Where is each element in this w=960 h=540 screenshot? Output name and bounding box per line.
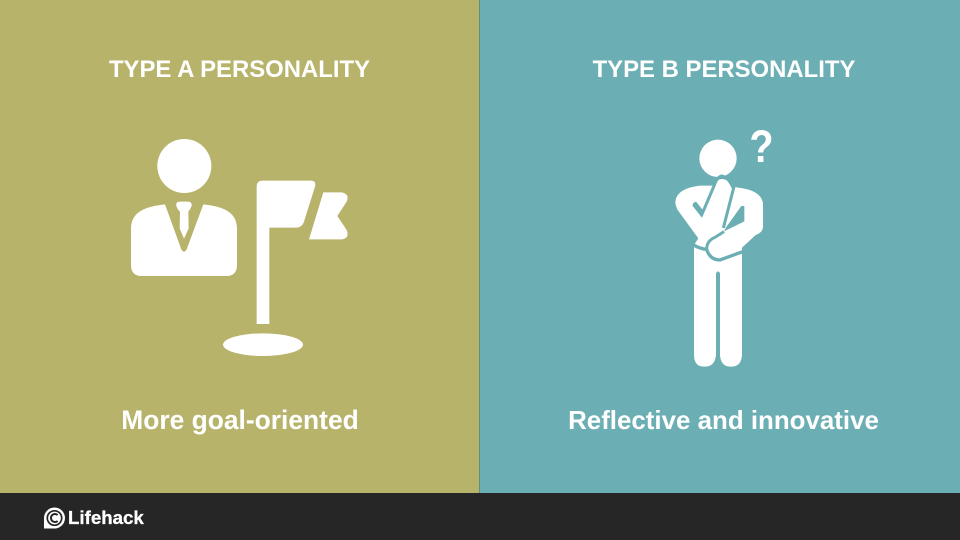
panel: type A personality bbox=[0, 0, 479, 493]
logo wordmark: Lifehack bbox=[68, 507, 144, 528]
caption: type A: More goal-oriented bbox=[121, 405, 359, 435]
icon: thinking person with question mark bbox=[675, 122, 774, 367]
caption: type B: Reflective and innovative bbox=[568, 407, 879, 435]
heading: type B: TYPE B PERSONALITY bbox=[593, 56, 855, 83]
panel: type B personality bbox=[479, 0, 960, 493]
icon: thinking person with question mark: ? bbox=[749, 122, 774, 172]
footer bar bbox=[0, 493, 960, 540]
icon: businessman with flag bbox=[131, 139, 348, 356]
heading: type A: TYPE A PERSONALITY bbox=[109, 56, 370, 83]
icon: Lifehack logo bbox=[44, 508, 65, 528]
